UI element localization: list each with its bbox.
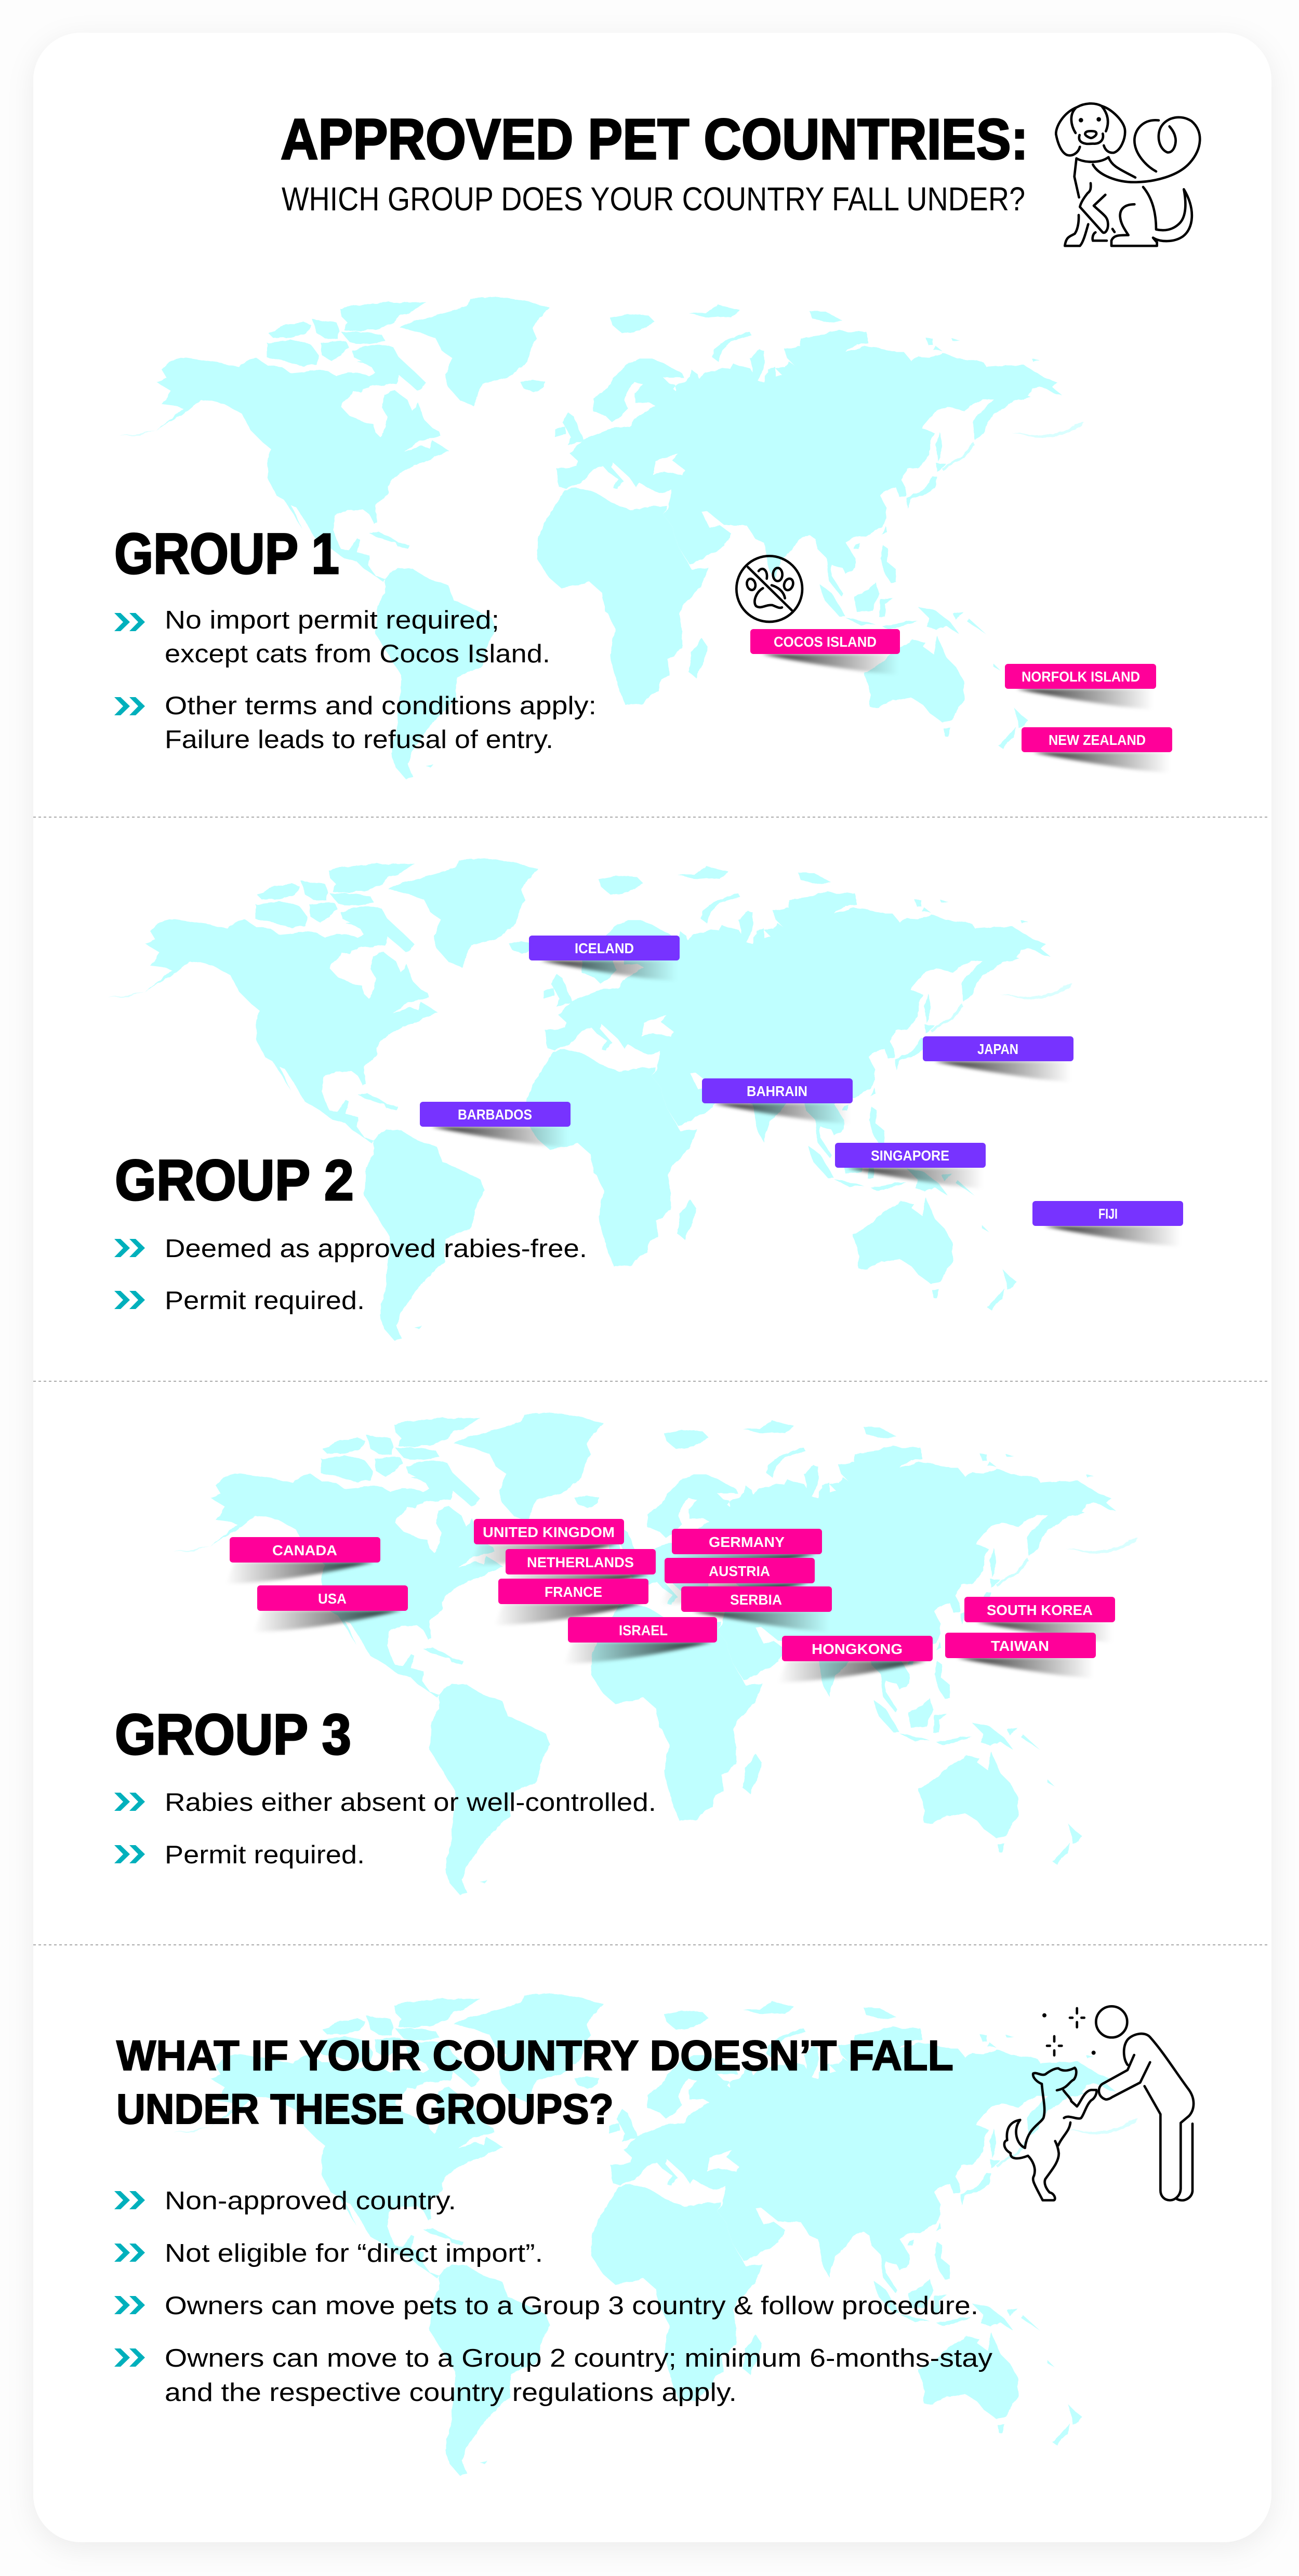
bullet: no import permit: except cats from Cocos Island. bbox=[165, 640, 550, 668]
label: united kingdom: UNITED KINGDOM bbox=[483, 1524, 615, 1540]
label: iceland: ICELAND bbox=[575, 940, 634, 956]
label: netherlands: NETHERLANDS bbox=[527, 1554, 634, 1570]
label: usa bbox=[257, 1585, 408, 1611]
world map: group 2 bbox=[108, 858, 1072, 1340]
bullet: permit required: Permit required. bbox=[165, 1287, 365, 1315]
label: serbia: SERBIA bbox=[730, 1592, 782, 1608]
label: new zealand: NEW ZEALAND bbox=[1049, 732, 1146, 748]
bullet: other terms: Failure leads to refusal of entry. bbox=[165, 726, 553, 754]
bullet: no import permit bbox=[114, 606, 550, 668]
label: canada bbox=[230, 1537, 380, 1563]
label: new zealand bbox=[1022, 727, 1172, 752]
heading: group 2: GROUP 2 bbox=[115, 1149, 354, 1212]
divider 2 bbox=[33, 1381, 1268, 1382]
label: barbados bbox=[420, 1102, 571, 1127]
bullet: other terms: Other terms and conditions apply: bbox=[165, 692, 597, 720]
label: south korea: SOUTH KOREA bbox=[987, 1602, 1093, 1618]
label: norfolk island bbox=[1005, 664, 1156, 689]
bullet: rabies absent: Rabies either absent or well-controlled. bbox=[165, 1788, 656, 1817]
label: france bbox=[498, 1579, 648, 1604]
bullet: group 2 move: and the respective country regulations apply. bbox=[165, 2379, 737, 2407]
label: israel: ISRAEL bbox=[619, 1622, 668, 1638]
label: hongkong bbox=[782, 1636, 933, 1661]
label: hongkong: HONGKONG bbox=[812, 1641, 903, 1657]
label shadows: group 1 bbox=[762, 654, 1170, 773]
world map: group 3 bbox=[173, 1412, 1137, 1894]
bullet: group 2 move: Owners can move to a Group 2 country; minimum 6-months-stay bbox=[165, 2344, 993, 2372]
bullet: not eligible: Not eligible for “direct import”. bbox=[165, 2239, 543, 2267]
label: cocos island bbox=[750, 629, 900, 654]
section: group 1 bbox=[114, 297, 1172, 779]
heading: what if: WHAT IF YOUR COUNTRY DOESN’T FALL bbox=[116, 2032, 953, 2079]
label: fiji: FIJI bbox=[1098, 1206, 1118, 1222]
label: fiji bbox=[1032, 1201, 1183, 1226]
label: singapore: SINGAPORE bbox=[871, 1147, 949, 1164]
label: singapore bbox=[835, 1143, 986, 1168]
world map: other countries bbox=[173, 1993, 1137, 2475]
label: germany bbox=[672, 1529, 822, 1554]
label: norfolk island: NORFOLK ISLAND bbox=[1022, 669, 1140, 685]
label: bahrain: BAHRAIN bbox=[747, 1083, 807, 1099]
icon: dog with leash bbox=[1056, 103, 1200, 246]
bullet: no import permit: No import permit required; bbox=[165, 606, 499, 634]
bullet: group 2 move bbox=[114, 2344, 993, 2407]
section: other countries bbox=[114, 1993, 1194, 2475]
label: japan: JAPAN bbox=[977, 1041, 1018, 1057]
label: france: FRANCE bbox=[545, 1584, 602, 1600]
label: iceland bbox=[529, 936, 680, 960]
label: israel bbox=[568, 1617, 717, 1643]
bullet: non-approved: Non-approved country. bbox=[165, 2187, 456, 2215]
title: APPROVED PET COUNTRIES: bbox=[281, 108, 1028, 171]
divider 3 bbox=[33, 1944, 1268, 1945]
heading: what if: UNDER THESE GROUPS? bbox=[116, 2086, 614, 2133]
label: austria bbox=[665, 1558, 815, 1583]
heading: group 3: GROUP 3 bbox=[115, 1703, 351, 1767]
label: austria: AUSTRIA bbox=[709, 1563, 770, 1579]
icon: person and dog bbox=[1004, 2006, 1194, 2200]
bullet: rabies-free: Deemed as approved rabies-free. bbox=[165, 1235, 587, 1263]
label: japan bbox=[923, 1036, 1073, 1061]
label: taiwan: TAIWAN bbox=[991, 1638, 1049, 1654]
label: south korea bbox=[964, 1597, 1115, 1622]
label: cocos island: COCOS ISLAND bbox=[774, 634, 877, 650]
label: germany: GERMANY bbox=[709, 1534, 785, 1550]
label: serbia bbox=[681, 1586, 832, 1612]
heading: what if bbox=[116, 2032, 953, 2133]
label: usa: USA bbox=[318, 1591, 347, 1607]
label: barbados: BARBADOS bbox=[458, 1106, 532, 1123]
label: bahrain bbox=[702, 1078, 853, 1103]
bullet: other terms bbox=[114, 692, 597, 754]
header bbox=[281, 103, 1200, 246]
divider 1 bbox=[33, 817, 1268, 818]
bullet: permit required: Permit required. bbox=[165, 1841, 365, 1869]
label: taiwan bbox=[945, 1633, 1096, 1658]
label shadows: group 3 bbox=[226, 1544, 1112, 1683]
label: netherlands bbox=[506, 1549, 656, 1574]
label: united kingdom bbox=[474, 1519, 624, 1544]
section: group 2 bbox=[108, 858, 1183, 1340]
subtitle: WHICH GROUP DOES YOUR COUNTRY FALL UNDER? bbox=[282, 180, 1025, 218]
bullet: group 3 move: Owners can move pets to a Group 3 country & follow procedure. bbox=[165, 2292, 978, 2320]
label: canada: CANADA bbox=[272, 1542, 337, 1558]
section: group 3 bbox=[114, 1412, 1137, 1894]
icon: no paw bbox=[736, 556, 802, 622]
heading: group 1: GROUP 1 bbox=[114, 522, 339, 586]
world map: group 1 bbox=[119, 297, 1083, 779]
label shadows: group 2 bbox=[431, 960, 1181, 1247]
